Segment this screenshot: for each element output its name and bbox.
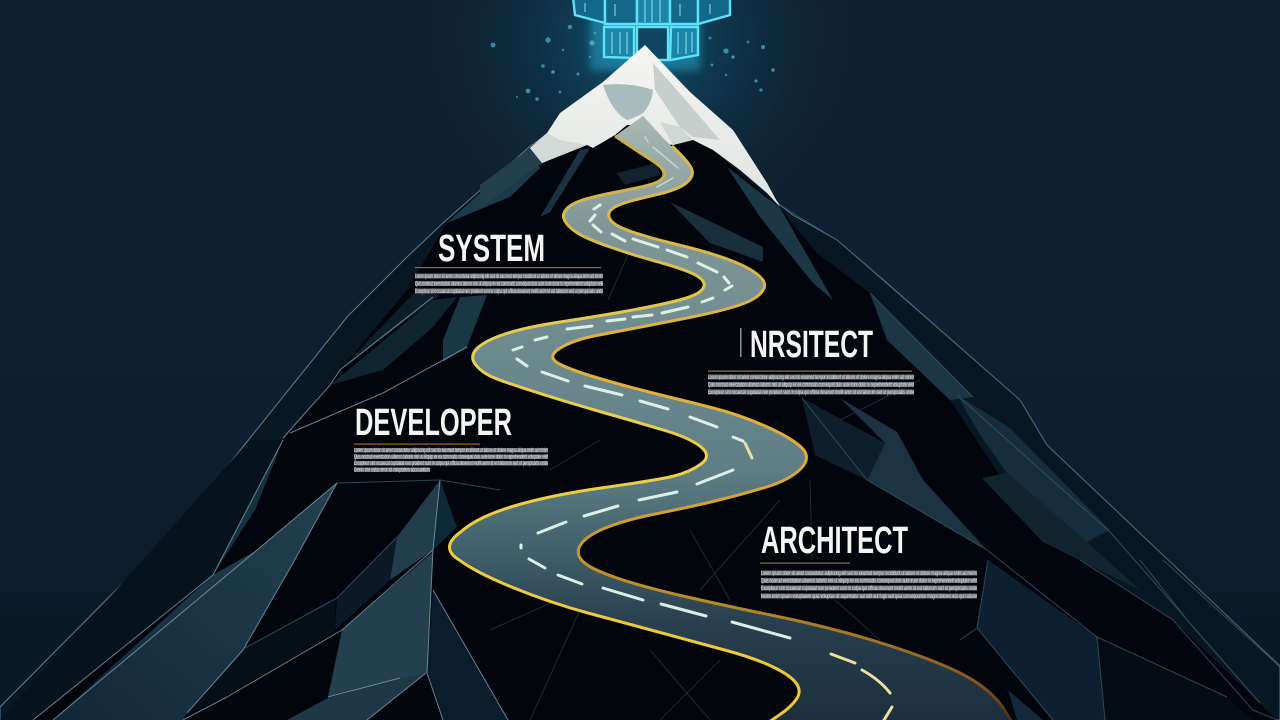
label: ARCHITECT: Lorem ipsum dolor sit amet consectetur adipiscing elit sed do eiusmod tempor incididunt ut labore et dolore magna aliqua enim ad minim — [761, 571, 977, 577]
label: NRSITECT: Lorem ipsum dolor sit amet consectetur adipiscing elit sed do eiusmod tempor incididunt ut labore et dolore magna aliqua enim ad minim — [708, 375, 914, 381]
road edge: gold line A — [450, 136, 799, 720]
facet edge lines — [33, 205, 1280, 720]
label: NRSITECT — [708, 324, 914, 396]
label: SYSTEM — [415, 228, 603, 295]
road surface — [450, 116, 1012, 720]
rock facets: right flank — [617, 163, 1253, 720]
label: SYSTEM: Quis nostrud exercitation ullamco laboris nisi ut aliquip ex ea commodo consequat duis aute irure dolor in reprehenderit voluptate velit — [415, 282, 603, 288]
label: SYSTEM: Lorem ipsum dolor sit amet consectetur adipiscing elit sed do eiusmod tempor incididunt ut labore et dolore magna aliqua enim ad minim — [415, 274, 603, 280]
road edge: gold line B — [553, 146, 1012, 720]
label: ARCHITECT: Quis nostrud exercitation ullamco laboris nisi ut aliquip ex ea commodo consequat duis aute irure dolor in reprehenderit voluptate velit — [761, 578, 977, 584]
icon: glowing data blocks above the peak — [573, 0, 730, 70]
lane dashes — [513, 137, 892, 720]
snow cap — [530, 45, 780, 207]
label: DEVELOPER — [354, 402, 548, 474]
label: NRSITECT: NRSITECT — [750, 324, 873, 366]
label: DEVELOPER: Lorem ipsum dolor sit amet consectetur adipiscing elit sed do eiusmod tempor incididunt ut labore et dolore magna aliqua enim ad minim — [354, 448, 548, 454]
label: DEVELOPER: Omnis iste natus error sit voluptatem accusantium — [354, 468, 430, 474]
winding road — [450, 116, 1012, 720]
label: ARCHITECT: ARCHITECT — [761, 520, 908, 562]
label: DEVELOPER: Quis nostrud exercitation ullamco laboris nisi ut aliquip ex ea commodo consequat duis aute irure dolor in reprehenderit voluptate velit — [354, 454, 548, 460]
label: SYSTEM: SYSTEM — [438, 228, 545, 270]
stars around the summit — [491, 25, 775, 101]
label: SYSTEM: Excepteur sint occaecat cupidatat non proident sunt in culpa qui officia deserunt mollit anim id est laborum sed ut perspiciatis unde — [415, 289, 603, 295]
label: ARCHITECT: Nemo enim ipsam voluptatem quia voluptas sit aspernatur aut odit aut fugit sed quia consequuntur magni dolores eos qui ratione — [761, 594, 977, 600]
label: NRSITECT: Quis nostrud exercitation ullamco laboris nisi ut aliquip ex ea commodo consequat duis aute irure dolor in reprehenderit voluptate velit — [708, 382, 914, 388]
label: ARCHITECT: Excepteur sint occaecat cupidatat non proident sunt in culpa qui officia deserunt mollit anim id est laborum sed ut perspiciatis unde — [761, 586, 977, 592]
label: DEVELOPER: Excepteur sint occaecat cupidatat non proident sunt in culpa qui officia deserunt mollit anim id est laborum sed ut perspiciatis unde — [354, 461, 548, 467]
rock facets: left flank — [0, 148, 590, 720]
label: ARCHITECT — [760, 520, 977, 600]
label: DEVELOPER: DEVELOPER — [355, 402, 512, 444]
label: NRSITECT: Excepteur sint occaecat cupidatat non proident sunt in culpa qui officia deserunt mollit anim id est laborum sed ut perspiciatis unde — [708, 390, 914, 396]
